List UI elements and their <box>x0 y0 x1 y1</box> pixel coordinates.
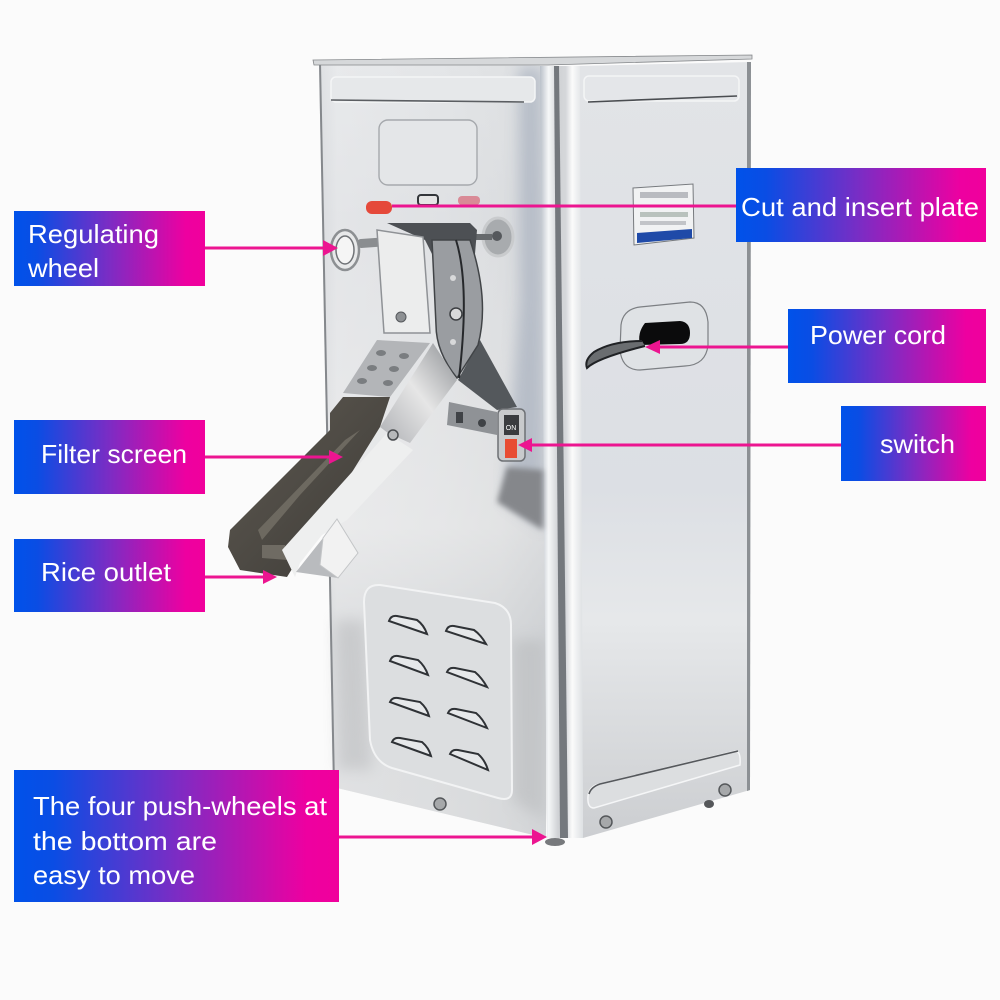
rear red tab <box>458 196 480 205</box>
outlet gate <box>320 519 358 578</box>
label: push wheels: easy to move <box>33 860 195 890</box>
outlet underside shading <box>296 538 338 578</box>
label: regulating wheel <box>14 211 205 286</box>
on-off switch <box>498 409 525 461</box>
dark filter chute <box>228 397 390 577</box>
arrow: cut and insert plate <box>392 204 736 208</box>
label: push wheels: The four push-wheels at <box>33 791 328 821</box>
small latch <box>418 195 438 205</box>
machine front panel <box>319 63 546 838</box>
label: cut and insert plate: Cut and insert plate <box>741 192 979 222</box>
machine illustration <box>228 55 752 846</box>
label: push wheels: the bottom are <box>33 826 217 856</box>
white mounting box <box>377 230 430 333</box>
label: power cord <box>788 309 986 383</box>
arrow: regulating wheel <box>205 240 338 256</box>
arrow: push wheels <box>339 829 547 845</box>
label: cut and insert plate <box>736 168 986 242</box>
machine side panel <box>578 62 751 838</box>
regulating wheel ring <box>331 230 392 270</box>
white lower chute plate <box>282 433 413 577</box>
label: rice outlet: Rice outlet <box>41 557 172 587</box>
right adjustment knob <box>472 218 513 256</box>
label: rice outlet <box>14 539 205 612</box>
disc housing <box>432 240 482 378</box>
arrow: filter screen <box>205 450 343 464</box>
arrow: rice outlet <box>205 570 277 584</box>
perforated plate <box>343 340 430 397</box>
corner post <box>540 66 583 838</box>
vent panel with louvers <box>364 585 512 799</box>
label: switch: switch <box>880 429 955 459</box>
name plate <box>633 184 694 245</box>
arrow: switch <box>518 438 841 452</box>
label: switch <box>841 406 986 481</box>
label: regulating wheel: wheel <box>27 253 99 283</box>
dark shadow under mechanism <box>497 467 543 530</box>
feet and screws <box>434 784 731 846</box>
label: filter screen: Filter screen <box>41 439 187 469</box>
power cord port <box>586 302 708 370</box>
arrow: power cord <box>645 340 788 354</box>
label: filter screen <box>14 420 205 494</box>
pointer lines <box>205 206 841 845</box>
label: power cord: Power cord <box>810 320 946 350</box>
label: push wheels <box>14 770 339 902</box>
mounting bracket <box>447 402 497 435</box>
red knob <box>366 201 392 214</box>
right dark support leg <box>458 340 517 410</box>
hopper block top <box>387 223 477 300</box>
chute bolt <box>388 430 398 440</box>
upper side band <box>380 343 457 443</box>
on-off switch: ON <box>506 425 516 432</box>
label: regulating wheel: Regulating <box>28 219 159 249</box>
top rim <box>313 55 752 65</box>
